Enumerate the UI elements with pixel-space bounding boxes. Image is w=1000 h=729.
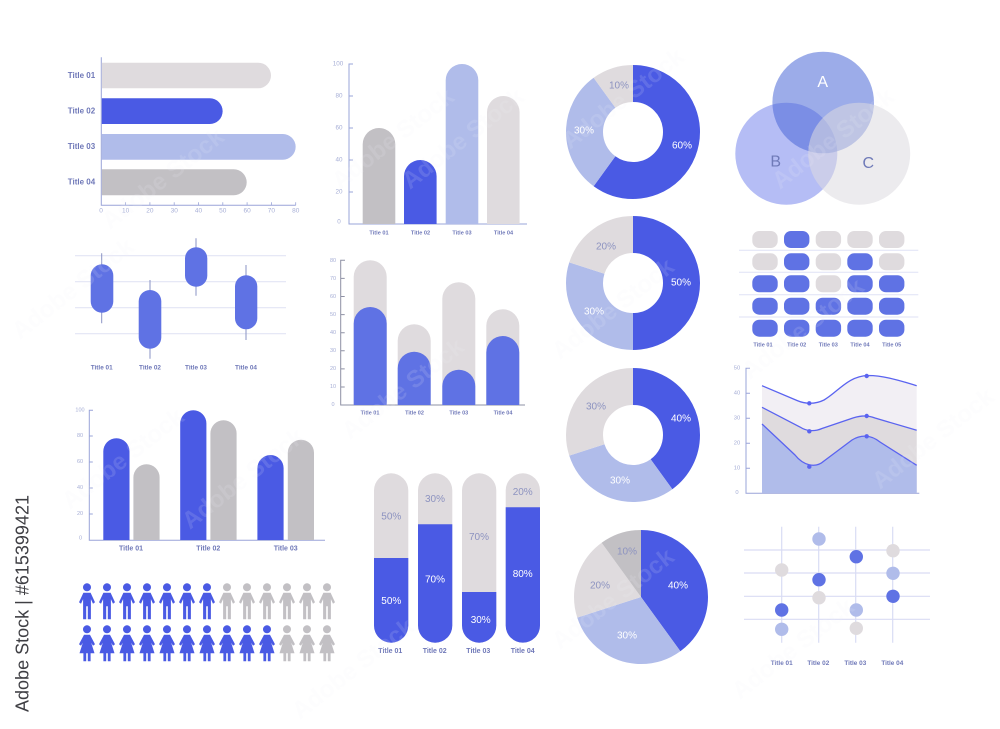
donut chart 60/30/10 bbox=[574, 80, 692, 180]
horizontal bar chart bbox=[68, 57, 300, 214]
dot matrix chart: Title 03 bbox=[844, 660, 867, 667]
donut chart 50/30/20 bbox=[584, 234, 691, 332]
grouped column chart: 20 bbox=[77, 511, 83, 517]
candlestick chart: Title 01 bbox=[91, 364, 113, 372]
column chart: four titles: 100 bbox=[333, 60, 344, 68]
candlestick chart: Title 04 bbox=[235, 364, 257, 372]
pie chart 40/30/20/10: 40% bbox=[668, 580, 688, 592]
horizontal bar chart: 40 bbox=[195, 208, 202, 214]
horizontal bar chart: Title 01 bbox=[68, 71, 96, 80]
area chart: 0 bbox=[735, 490, 739, 496]
stacked overlap column chart: 60 bbox=[330, 294, 336, 300]
donut chart 40/30/30: 40% bbox=[671, 414, 691, 424]
grouped column chart: Title 03 bbox=[274, 546, 298, 552]
rounded block matrix: Title 01 bbox=[753, 343, 773, 349]
stacked pill chart: 70% bbox=[469, 532, 489, 543]
donut chart 60/30/10: 60% bbox=[672, 140, 692, 152]
area chart: 40 bbox=[734, 390, 740, 396]
stacked pill chart bbox=[374, 473, 540, 655]
horizontal bar chart: 80 bbox=[292, 208, 300, 214]
horizontal bar chart: 60 bbox=[243, 208, 251, 214]
donut chart 60/30/10: 10% bbox=[609, 80, 629, 92]
stacked pill chart: 50% bbox=[381, 512, 401, 522]
watermark pattern: Adobe Stock bbox=[547, 543, 680, 655]
dot matrix chart bbox=[744, 527, 930, 667]
donut chart 50/30/20: 30% bbox=[584, 306, 604, 318]
pie chart 40/30/20/10 bbox=[590, 546, 688, 642]
venn diagram: B bbox=[770, 154, 781, 170]
stacked overlap column chart: 70 bbox=[330, 276, 336, 282]
column chart: four titles: 40 bbox=[335, 156, 343, 164]
watermark pattern: Adobe Stock bbox=[97, 123, 230, 235]
pictogram: female figures row bbox=[79, 625, 335, 661]
horizontal bar chart: 50 bbox=[219, 208, 227, 214]
stacked pill chart: 80% bbox=[513, 569, 533, 580]
donut chart 60/30/10: 30% bbox=[574, 126, 594, 136]
grouped column chart bbox=[75, 408, 325, 552]
rounded block matrix: Title 04 bbox=[850, 343, 870, 349]
stacked pill chart: Title 01 bbox=[378, 648, 402, 655]
watermark pattern: Adobe Stock bbox=[727, 593, 860, 705]
watermark pattern: Adobe Stock bbox=[287, 613, 420, 725]
stacked pill chart: 30% bbox=[425, 494, 445, 505]
candlestick chart: Title 02 bbox=[139, 364, 161, 372]
dot matrix chart: Title 01 bbox=[771, 660, 793, 667]
watermark pattern: Adobe Stock bbox=[7, 233, 140, 345]
area chart: 30 bbox=[734, 415, 740, 421]
rounded block matrix: Title 05 bbox=[882, 343, 901, 349]
grouped column chart: 60 bbox=[77, 459, 83, 465]
stacked overlap column chart: 40 bbox=[330, 330, 336, 336]
stacked pill chart: Title 02 bbox=[423, 648, 447, 655]
column chart: four titles: Title 02 bbox=[411, 231, 430, 237]
watermark pattern: Adobe Stock bbox=[737, 273, 870, 385]
horizontal bar chart: 20 bbox=[146, 208, 154, 214]
grouped column chart: Title 02 bbox=[196, 546, 220, 552]
pie chart 40/30/20/10: 20% bbox=[590, 580, 610, 592]
grouped column chart: 100 bbox=[75, 408, 85, 414]
watermark pattern: Adobe Stock bbox=[867, 383, 1000, 495]
area chart: 50 bbox=[734, 366, 740, 372]
stacked overlap column chart: Title 03 bbox=[449, 410, 468, 416]
stacked overlap column chart: 20 bbox=[330, 366, 336, 372]
stacked overlap column chart: 50 bbox=[330, 312, 336, 318]
candlestick chart bbox=[75, 238, 286, 372]
stacked pill chart: Title 03 bbox=[466, 648, 490, 655]
stacked overlap column chart: 0 bbox=[331, 402, 335, 408]
watermark pattern: Adobe Stock bbox=[337, 333, 470, 445]
venn diagram: A bbox=[817, 74, 828, 91]
horizontal bar chart: Title 04 bbox=[68, 178, 96, 186]
horizontal bar chart: 30 bbox=[171, 208, 178, 214]
column chart: four titles bbox=[333, 60, 527, 237]
candlestick chart: Title 03 bbox=[185, 364, 207, 372]
column chart: four titles: 80 bbox=[335, 92, 343, 100]
watermark pattern: Adobe Stock bbox=[397, 83, 530, 195]
watermark pattern: Adobe Stock bbox=[557, 43, 690, 155]
venn diagram: C bbox=[863, 155, 874, 172]
donut chart 40/30/30 bbox=[584, 386, 691, 486]
horizontal bar chart: Title 03 bbox=[68, 142, 96, 151]
donut chart 50/30/20: 50% bbox=[671, 278, 691, 288]
stacked overlap column chart: 80 bbox=[330, 258, 336, 264]
watermark pattern: Adobe Stock bbox=[767, 83, 900, 195]
grouped column chart: Title 01 bbox=[119, 546, 143, 552]
pictogram: male figures row bbox=[79, 583, 335, 619]
stacked overlap column chart: Title 02 bbox=[405, 410, 424, 416]
donut chart 50/30/20: 20% bbox=[596, 242, 616, 252]
column chart: four titles: 0 bbox=[337, 218, 341, 226]
area chart: 10 bbox=[734, 465, 740, 471]
column chart: four titles: 20 bbox=[335, 188, 343, 196]
watermark pattern: Adobe Stock bbox=[57, 403, 190, 515]
pie chart 40/30/20/10: 10% bbox=[617, 546, 637, 558]
vertical stock id text: Adobe Stock | #615399421 bbox=[12, 495, 32, 712]
stacked overlap column chart: 30 bbox=[330, 348, 336, 354]
column chart: four titles: Title 03 bbox=[452, 231, 472, 237]
stacked overlap column chart: Title 01 bbox=[361, 410, 379, 416]
rounded block matrix: Title 03 bbox=[819, 343, 838, 349]
stacked pill chart: 50% bbox=[381, 596, 401, 607]
donut chart 40/30/30: 30% bbox=[610, 476, 630, 486]
dot matrix chart: Title 04 bbox=[881, 660, 904, 667]
watermark pattern: Adobe Stock bbox=[327, 83, 460, 195]
grouped column chart: 0 bbox=[79, 536, 82, 542]
column chart: four titles: 60 bbox=[335, 124, 343, 132]
donut chart 40/30/30: 30% bbox=[586, 402, 606, 412]
watermark pattern: Adobe Stock bbox=[177, 423, 310, 535]
rounded block matrix bbox=[739, 231, 918, 349]
horizontal bar chart: 0 bbox=[99, 208, 103, 214]
rounded block matrix: Title 02 bbox=[787, 343, 806, 349]
stacked overlap column chart bbox=[330, 258, 525, 416]
venn diagram bbox=[735, 52, 910, 205]
horizontal bar chart: 10 bbox=[122, 208, 130, 214]
stacked pill chart: 20% bbox=[513, 487, 533, 498]
watermark pattern: Adobe Stock bbox=[547, 253, 680, 365]
horizontal bar chart: Title 02 bbox=[68, 106, 96, 116]
grouped column chart: 80 bbox=[77, 433, 83, 439]
pie chart 40/30/20/10: 30% bbox=[617, 630, 637, 642]
stacked overlap column chart: Title 04 bbox=[494, 410, 513, 416]
horizontal bar chart: 70 bbox=[268, 208, 275, 214]
stacked overlap column chart: 10 bbox=[330, 384, 336, 390]
column chart: four titles: Title 04 bbox=[494, 231, 514, 237]
grouped column chart: 40 bbox=[77, 485, 83, 491]
column chart: four titles: Title 01 bbox=[369, 231, 389, 237]
area chart bbox=[734, 366, 919, 496]
stacked pill chart: Title 04 bbox=[511, 648, 535, 655]
area chart: 20 bbox=[734, 440, 740, 446]
dot matrix chart: Title 02 bbox=[807, 660, 830, 667]
stacked pill chart: 70% bbox=[425, 574, 445, 586]
stacked pill chart: 30% bbox=[471, 615, 491, 626]
